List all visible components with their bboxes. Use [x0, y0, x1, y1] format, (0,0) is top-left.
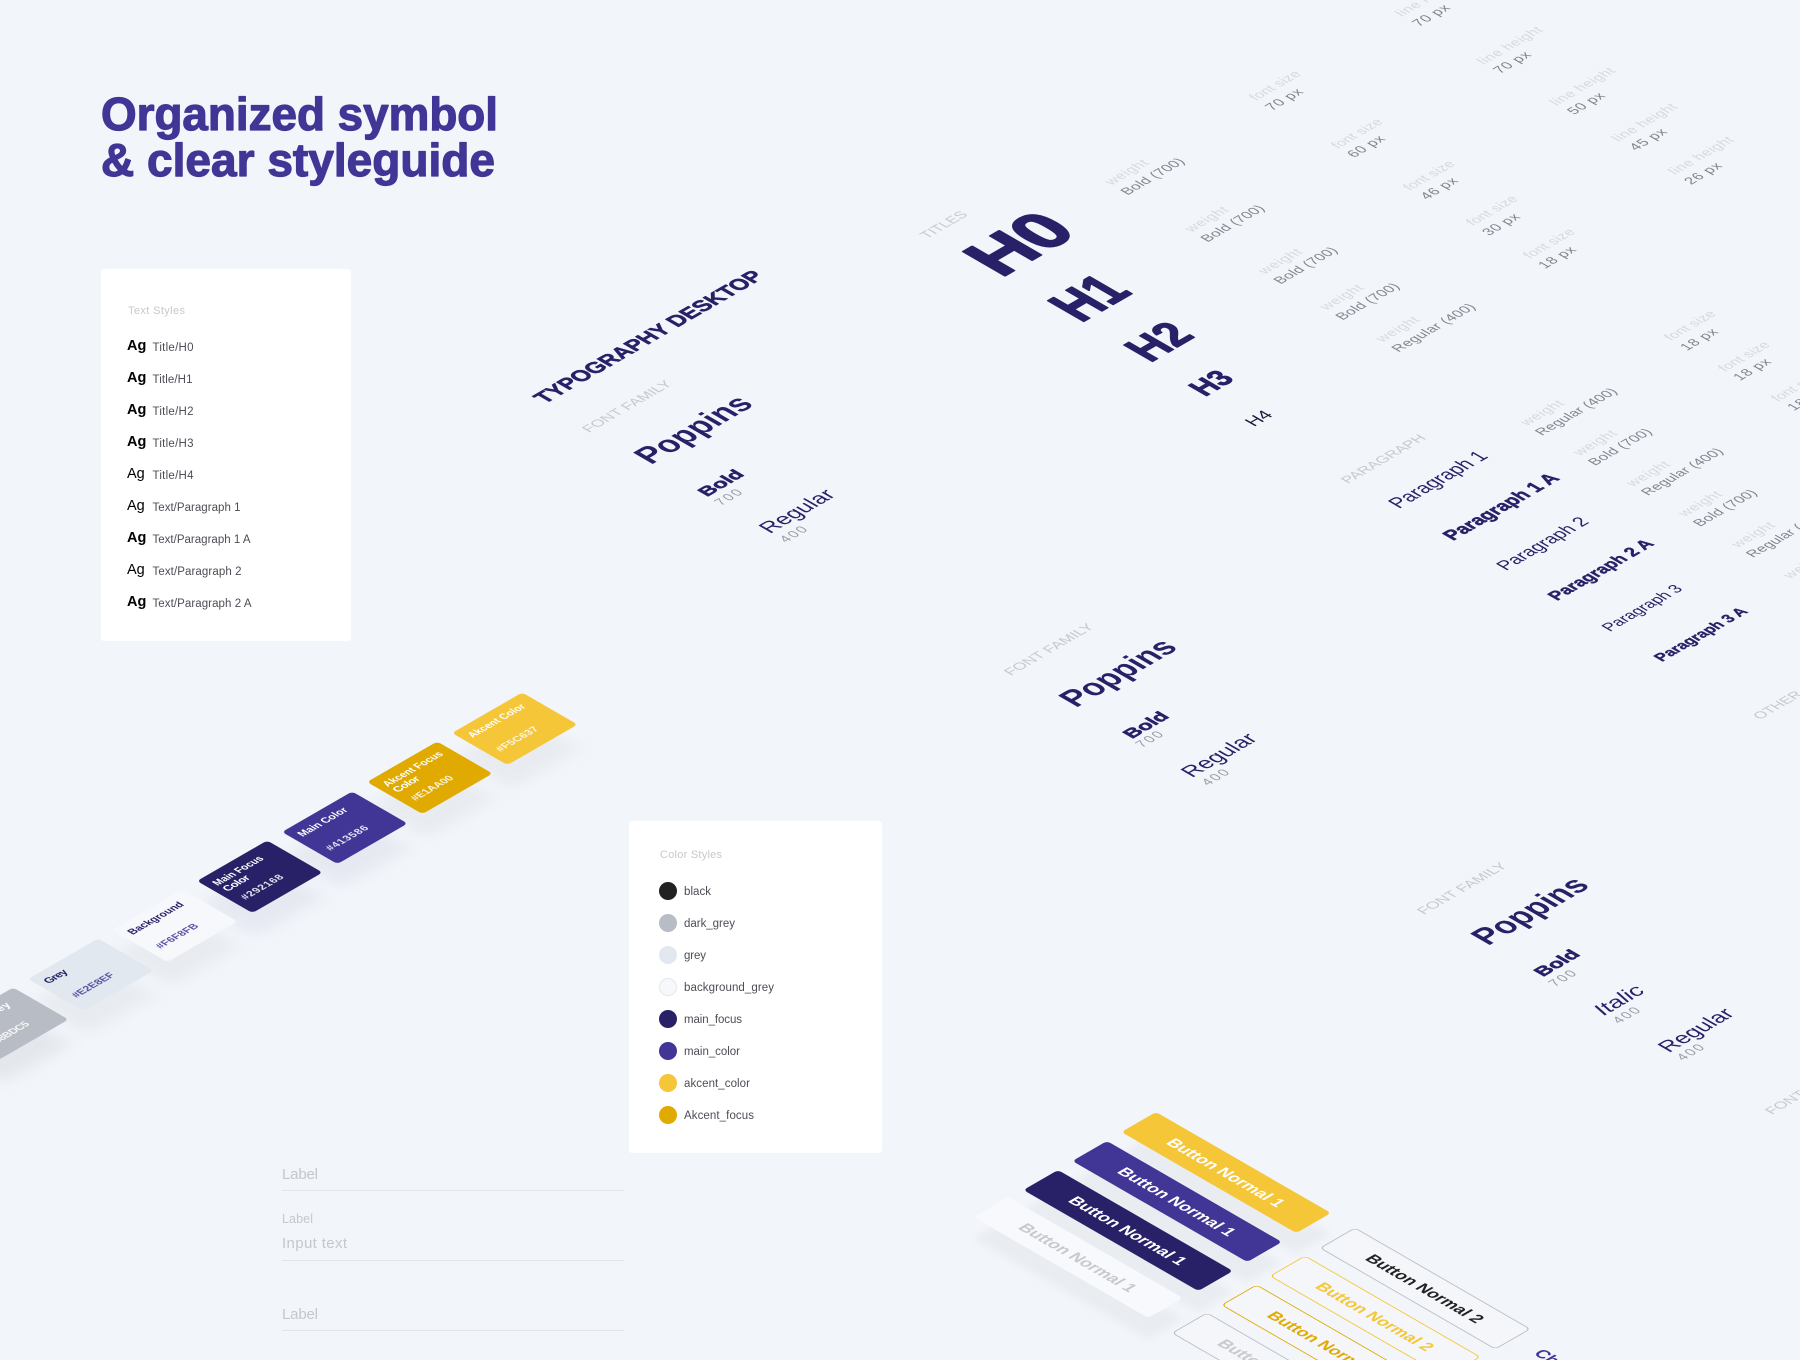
- font weight: regular: Regular: [1175, 729, 1263, 781]
- specimen: Paragraph 1: Paragraph 1: [1383, 448, 1493, 512]
- swatch: background: #F6F8FB: [154, 922, 202, 951]
- text style: Text/Paragraph 2: Text/Paragraph 2: [152, 566, 242, 578]
- line height value H1: 70 px: [1489, 49, 1535, 76]
- colour style: black: [659, 882, 711, 900]
- button: main: [1072, 1141, 1282, 1262]
- font family block 2: [1000, 621, 1263, 788]
- weight value H2: Bold (700): [1269, 244, 1341, 286]
- weight label P2: weight: [1621, 458, 1674, 489]
- weight label P1: weight: [1515, 397, 1568, 428]
- input: filled: Input text: [282, 1235, 348, 1252]
- input fields: [282, 1166, 624, 1331]
- specimen: Paragraph 2: Paragraph 2: [1492, 514, 1594, 574]
- input: filled: Label: [282, 1212, 313, 1226]
- text style: Title/H0: Ag: [127, 338, 146, 354]
- button: main focus: [1023, 1170, 1233, 1291]
- size label P1: font size: [1660, 308, 1720, 343]
- text style: Text/Paragraph 2: [127, 562, 242, 578]
- colour style: accent focus: Akcent_focus: [684, 1110, 754, 1122]
- button shadows: [973, 1133, 1331, 1339]
- text style: Title/H3: [127, 434, 194, 450]
- title specs: line height column: [1391, 0, 1737, 187]
- colour style: dark grey: [659, 914, 735, 932]
- label: font family: FONT FAMILY: [578, 378, 676, 435]
- font weight: bold: Bold: [693, 467, 749, 499]
- panel heading: text styles: Text Styles: [128, 305, 186, 317]
- font family block 1: [578, 378, 841, 545]
- paragraph specs: font size column: [1660, 308, 1800, 413]
- weight label P2A: weight: [1673, 488, 1726, 519]
- line height label H1: line height: [1473, 24, 1546, 67]
- swatch: dark grey: [0, 988, 91, 1084]
- weight label H1: weight: [1179, 204, 1232, 235]
- swatch: grey: Grey: [41, 968, 72, 986]
- weight label P3: weight: [1726, 519, 1779, 550]
- swatch: main colour: Main Color: [295, 806, 352, 839]
- colour style: main colour: [659, 1042, 740, 1060]
- font weight: bold: Bold: [1118, 709, 1174, 741]
- specimen: H1: H1: [1034, 266, 1144, 330]
- text style: Title/H3: Ag: [127, 434, 146, 450]
- font weight: bold: Bold: [1529, 947, 1585, 979]
- text style: Text/Paragraph 1 A: [127, 530, 251, 546]
- text style: Text/Paragraph 2 A: Text/Paragraph 2 A: [152, 598, 252, 610]
- line height label H3: line height: [1607, 101, 1681, 144]
- text style: Title/H1: [127, 370, 192, 386]
- label: titles: TITLES: [916, 208, 971, 241]
- swatch: grey: [9, 938, 176, 1035]
- size value P1A: 18 px: [1729, 356, 1775, 383]
- size label H3: font size: [1462, 193, 1522, 228]
- text style: Title/H0: [127, 338, 194, 354]
- swatch: main focus colour: Color: [220, 873, 254, 893]
- weight label H4: weight: [1370, 314, 1423, 345]
- weight label P1A: weight: [1568, 427, 1621, 458]
- font name: Poppins: Poppins: [625, 390, 761, 469]
- text style: Text/Paragraph 1: Ag: [127, 498, 145, 514]
- text style: Title/H0: Title/H0: [152, 342, 194, 354]
- text style: Text/Paragraph 1 A: Text/Paragraph 1 A: [152, 534, 251, 546]
- swatch: accent colour: [433, 692, 600, 789]
- solid buttons: [973, 1112, 1331, 1318]
- swatch: background: Background: [125, 900, 187, 937]
- swatch: main colour: [263, 792, 430, 888]
- button outline: accent: Button Normal 2: [1311, 1280, 1438, 1354]
- size value H0: 70 px: [1261, 86, 1307, 113]
- text style: Text/Paragraph 2 A: [127, 594, 252, 610]
- input: filled: [282, 1212, 624, 1261]
- weight label H3: weight: [1314, 282, 1367, 313]
- swatch: accent colour: #F5C637: [494, 725, 542, 754]
- specimen: H2: H2: [1114, 315, 1205, 369]
- swatch: accent colour: Akcent Color: [465, 702, 530, 740]
- button outline: black: [1320, 1228, 1530, 1349]
- button outline: black: Button Normal 2: [1361, 1252, 1488, 1326]
- swatch: main focus colour: [178, 840, 345, 937]
- colour style: accent focus: [659, 1106, 754, 1124]
- title: [101, 88, 498, 186]
- colour style: main focus: main_focus: [684, 1014, 742, 1026]
- size label H1: font size: [1327, 116, 1387, 151]
- swatch: accent focus colour: [348, 742, 515, 838]
- weight value P2: Regular (400): [1637, 445, 1727, 498]
- swatch: accent focus colour: Color: [390, 774, 424, 794]
- line height label H4: line height: [1664, 134, 1737, 177]
- swatch: accent focus colour: Akcent Focus: [380, 750, 447, 789]
- colour style: accent colour: akcent_color: [684, 1078, 750, 1090]
- font name: Poppins: Poppins: [1050, 633, 1185, 712]
- text style: Title/H2: [127, 402, 194, 418]
- swatch: background: [93, 890, 260, 986]
- panel: text styles: [101, 269, 351, 641]
- weight value H3: Bold (700): [1331, 280, 1403, 322]
- weight label H2: weight: [1253, 246, 1306, 277]
- size label H0: font size: [1245, 68, 1305, 103]
- heading: typography desktop: TYPOGRAPHY DESKTOP: [528, 267, 769, 407]
- button: accent: Button Normal 1: [1162, 1136, 1289, 1210]
- colour style: background grey: [660, 978, 774, 996]
- label: font family: FONT FAMILY: [1000, 621, 1098, 678]
- colour style: grey: grey: [684, 950, 706, 962]
- specimen: Paragraph 2 A: Paragraph 2 A: [1543, 536, 1658, 603]
- colour style: main colour: main_color: [684, 1046, 740, 1058]
- line height value H2: 50 px: [1563, 90, 1609, 117]
- weight value: 400: 400: [776, 524, 811, 545]
- weight value: 400: 400: [1198, 767, 1233, 788]
- size label H2: font size: [1399, 158, 1459, 193]
- title specs: weight column: [1099, 155, 1479, 354]
- text style: Title/H4: Ag: [127, 466, 145, 482]
- size label P1A: font size: [1714, 339, 1774, 374]
- weight value P2A: Bold (700): [1689, 487, 1761, 529]
- label: paragraph: PARAGRAPH: [1337, 432, 1429, 486]
- weight value: 400: 400: [1673, 1042, 1708, 1063]
- text style: Text/Paragraph 1 A: Ag: [127, 530, 146, 546]
- text style: Text/Paragraph 2 A: Ag: [127, 594, 146, 610]
- button: disabled: Button Normal 1: [1014, 1221, 1141, 1295]
- paragraph specs: weight column: [1515, 385, 1800, 581]
- size value P1: 18 px: [1676, 326, 1722, 353]
- button: main focus: Button Normal 1: [1064, 1194, 1191, 1268]
- text style: Title/H4: [127, 466, 194, 482]
- button: disabled: [973, 1197, 1183, 1318]
- size value H1: 60 px: [1343, 133, 1389, 160]
- weight value: 700: 700: [1545, 968, 1580, 989]
- size value H3: 30 px: [1478, 211, 1524, 238]
- weight value P1: Regular (400): [1531, 385, 1621, 438]
- paragraph specimen: [1337, 432, 1752, 664]
- specimen: Paragraph 3 A: Paragraph 3 A: [1651, 605, 1752, 664]
- weight value H4: Regular (400): [1387, 301, 1479, 354]
- font family block 3: [1413, 860, 1740, 1062]
- text style: Text/Paragraph 1: [127, 498, 240, 514]
- specimen: H0: H0: [946, 201, 1092, 286]
- weight value P1A: Bold (700): [1584, 426, 1656, 468]
- weight value: 400: 400: [1609, 1005, 1644, 1026]
- button: accent: [1121, 1112, 1331, 1233]
- size label H4: font size: [1519, 226, 1579, 261]
- size value H2: 46 px: [1416, 175, 1462, 202]
- text style: Title/H1: Ag: [127, 370, 146, 386]
- panel: colour styles: [629, 821, 882, 1153]
- text style: Title/H2: Ag: [127, 402, 146, 418]
- button outline: accent: [1270, 1256, 1480, 1360]
- text style: Title/H4: Title/H4: [152, 470, 194, 482]
- button outline: grey: [1172, 1313, 1382, 1360]
- colour swatches: [0, 692, 600, 1084]
- weight value: 700: 700: [711, 487, 746, 508]
- colour style: accent colour: [659, 1074, 750, 1092]
- line height label H2: line height: [1545, 65, 1619, 108]
- button outline: accent focus: [1222, 1285, 1432, 1360]
- size value H4: 18 px: [1534, 244, 1580, 271]
- colour style: grey: [659, 946, 706, 964]
- swatch: main focus colour: Main Focus: [210, 854, 267, 888]
- font weight: regular: Regular: [1652, 1004, 1740, 1056]
- input: empty label: Label: [282, 1166, 318, 1183]
- swatch: main colour: #413586: [324, 824, 372, 853]
- text style: Title/H3: Title/H3: [152, 438, 194, 450]
- colour style: dark grey: dark_grey: [684, 918, 735, 930]
- font weight: regular: Regular: [753, 485, 841, 537]
- input: empty label 2: Label: [282, 1306, 318, 1323]
- specimen: Paragraph 3: Paragraph 3: [1598, 582, 1687, 634]
- label: font family: FONT FAMILY: [1413, 860, 1511, 917]
- colour style: black: black: [684, 886, 711, 898]
- specimen: Paragraph 1 A: Paragraph 1 A: [1438, 470, 1565, 544]
- button: main: Button Normal 1: [1113, 1165, 1240, 1239]
- text style: Text/Paragraph 2: Ag: [127, 562, 145, 578]
- line height value H4: 26 px: [1680, 160, 1726, 187]
- specimen: H3: H3: [1181, 365, 1241, 401]
- swatch: grey: #E2E8EF: [70, 971, 119, 1000]
- colour style: background grey: background_grey: [684, 982, 774, 994]
- title: Organized symbol: [101, 88, 498, 140]
- weight value: 700: 700: [1132, 729, 1167, 750]
- text style: Text/Paragraph 1: Text/Paragraph 1: [152, 502, 240, 514]
- title specs: font size column: [1245, 68, 1580, 271]
- swatch: main focus colour: #292168: [239, 873, 287, 902]
- font name: Poppins: Poppins: [1462, 871, 1597, 950]
- titles specimen: [916, 201, 1277, 429]
- weight label H0: weight: [1099, 157, 1152, 188]
- swatch: accent focus colour: #E1AA00: [409, 774, 457, 803]
- weight value H0: Bold (700): [1116, 155, 1188, 197]
- line height value H0: 70 px: [1408, 2, 1454, 29]
- text style: Title/H1: Title/H1: [152, 374, 192, 386]
- text style: Title/H2: Title/H2: [152, 406, 194, 418]
- line height value H3: 45 px: [1625, 126, 1671, 153]
- weight value H1: Bold (700): [1196, 202, 1268, 244]
- title: & clear styleguide: [101, 134, 495, 186]
- font weight: italic: Italic: [1587, 981, 1651, 1019]
- panel heading: colour styles: Color Styles: [660, 849, 722, 861]
- colour style: main focus: [659, 1010, 742, 1028]
- specimen: H4: H4: [1240, 407, 1277, 429]
- outline buttons: [1172, 1228, 1530, 1360]
